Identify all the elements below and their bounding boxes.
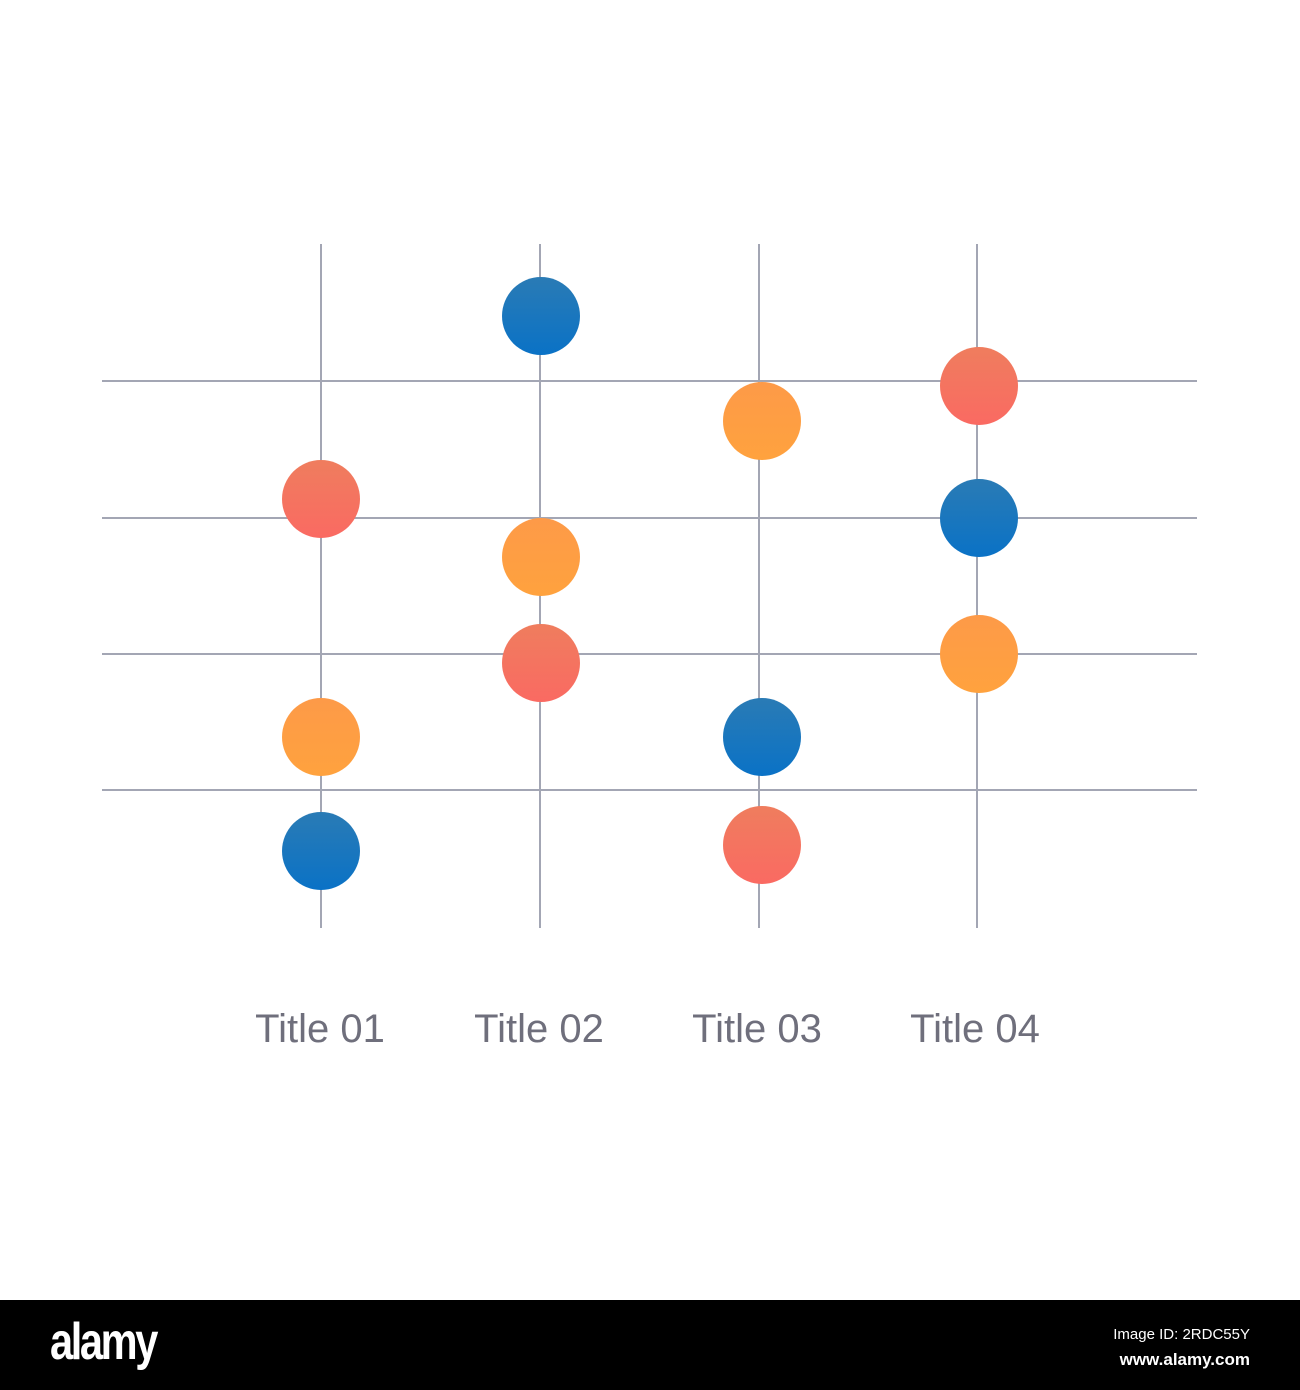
column 3 dots (723, 382, 801, 884)
column labels: Title 02 (474, 1007, 604, 1051)
column labels: Title 04 (910, 1007, 1040, 1051)
footer bar (0, 1300, 1300, 1390)
logo: alamy (50, 1313, 156, 1371)
column 2 dots (502, 277, 580, 702)
image id: Image ID: 2RDC55Y (1113, 1326, 1250, 1343)
column 1 dots (282, 460, 360, 890)
column labels: Title 03 (692, 1007, 822, 1051)
image id: www.alamy.com (1120, 1350, 1250, 1369)
column labels: Title 01 (255, 1007, 385, 1051)
image id (1113, 1326, 1250, 1369)
column labels (255, 1007, 1040, 1051)
column 4 dots (940, 347, 1018, 693)
